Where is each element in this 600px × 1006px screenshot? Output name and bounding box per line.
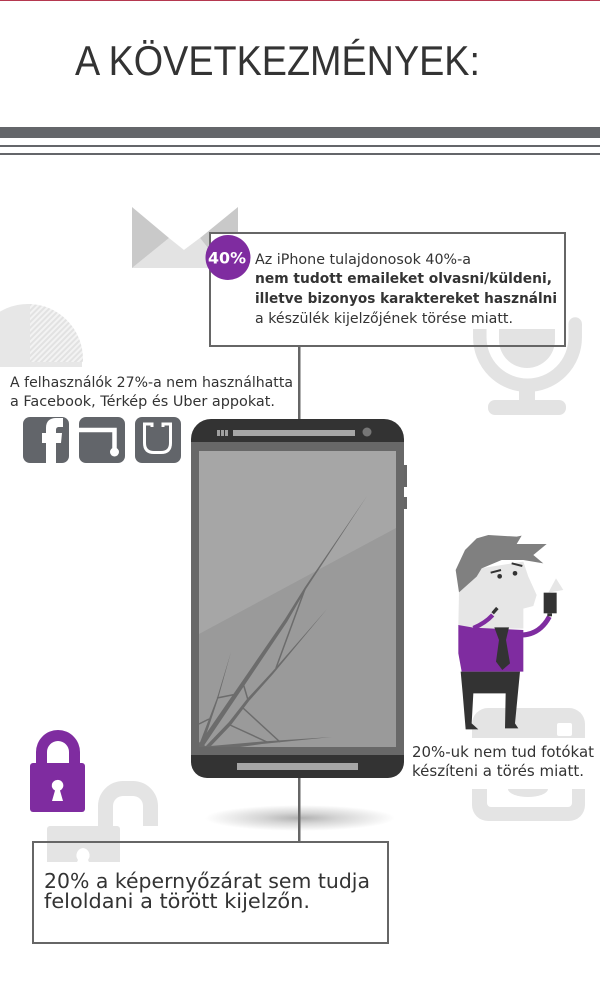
panel: 20 percent lock screen callout	[33, 842, 388, 943]
screen cracks	[199, 496, 367, 747]
figure trousers	[461, 672, 520, 729]
icon: camera outline	[408, 708, 600, 821]
side buttons	[403, 465, 407, 509]
text: 20 percent photos	[412, 743, 594, 780]
text: 27 percent of users: a Facebook, Térkép és Uber appokat.	[10, 394, 275, 410]
badge: 40%: 40%	[208, 248, 246, 268]
panel: 40 percent callout	[210, 233, 565, 346]
callout text: a készülék kijelzőjének törése miatt.	[255, 311, 513, 327]
icon: maps	[79, 417, 125, 463]
icon: open lock outline	[47, 781, 158, 862]
phone screen	[199, 451, 396, 747]
callout text: feloldani a törött kijelzőn.	[44, 889, 310, 913]
icon: uber	[135, 417, 181, 463]
phone shadow	[205, 805, 395, 831]
icon: facebook	[23, 417, 69, 463]
text: 20 percent photos: készíteni a törés miatt.	[412, 762, 584, 780]
figure tie	[494, 627, 510, 670]
badge: 40%	[206, 235, 250, 280]
figure hair	[456, 535, 547, 592]
callout text: 20% a képernyőzárat sem tudja	[44, 869, 370, 893]
text: 27 percent of users: A felhasználók 27%-a nem használhatta	[10, 375, 293, 391]
icon: pie chart	[0, 304, 83, 367]
icon: purple lock	[30, 730, 85, 812]
text: 27 percent of users	[10, 375, 293, 410]
callout text	[44, 869, 370, 913]
figure shirt	[458, 625, 523, 672]
phone	[191, 419, 407, 778]
icon: microphone	[480, 317, 582, 415]
figure skin	[458, 562, 537, 629]
callout text: Az iPhone tulajdonosok 40%-a	[255, 252, 471, 268]
text: 20 percent photos: 20%-uk nem tud fotókat	[412, 743, 594, 761]
icon: envelope	[132, 207, 238, 268]
callout text: illetve bizonyos karaktereket használni	[255, 291, 557, 307]
figure phone	[544, 593, 557, 613]
callout text: nem tudott emaileket olvasni/küldeni,	[255, 271, 552, 287]
figure: man holding phone	[456, 535, 563, 729]
title: A KÖVETKEZMÉNYEK:	[75, 37, 480, 84]
callout text	[255, 252, 557, 327]
